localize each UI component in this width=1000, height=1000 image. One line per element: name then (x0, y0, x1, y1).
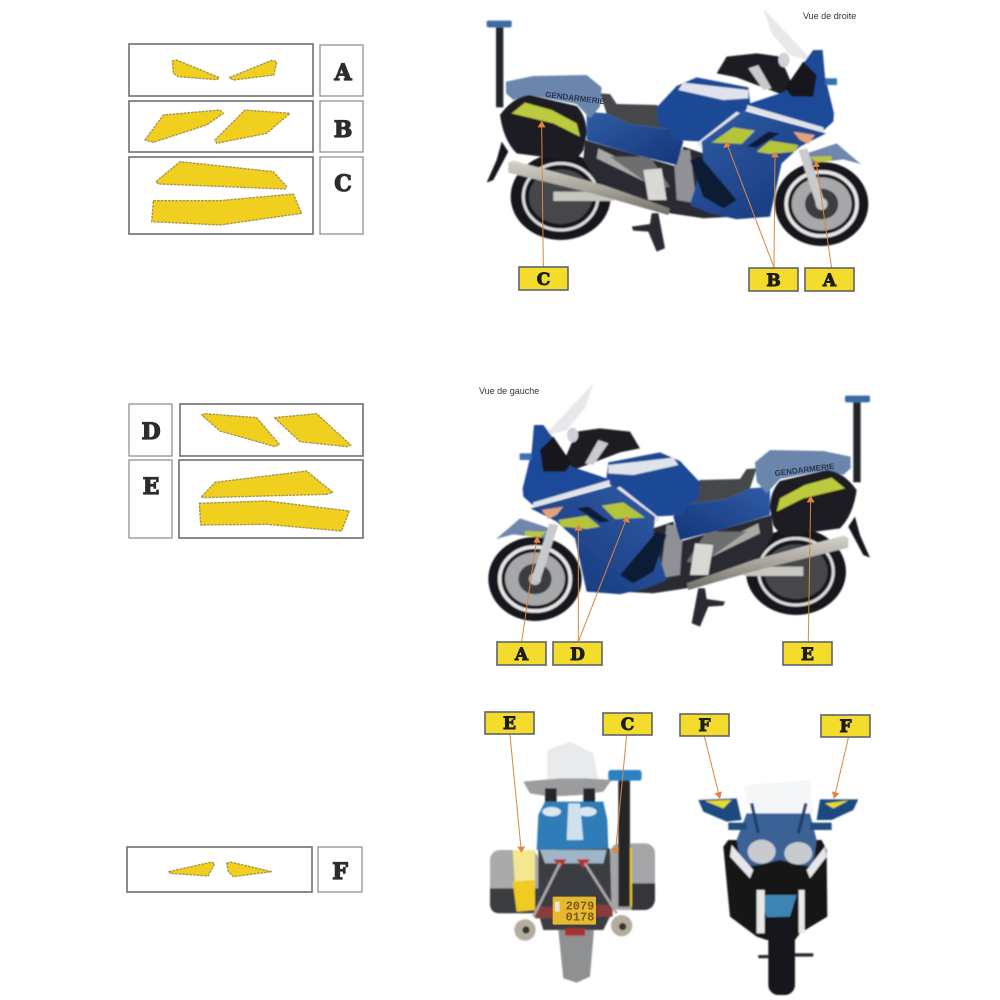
windshield (743, 780, 813, 813)
panel: sticker C: C (334, 171, 352, 197)
panel: sticker B: B (334, 117, 352, 143)
label A: A (822, 271, 837, 291)
arrows: rear view (510, 735, 627, 854)
front wheel (768, 913, 795, 995)
panel: sticker E (129, 460, 363, 538)
licence plate (553, 897, 596, 925)
label D (553, 642, 602, 665)
beacon pole (487, 21, 512, 107)
center rear (538, 848, 612, 930)
label E left: E (801, 645, 814, 665)
front mudguard (807, 143, 861, 164)
label E rear (485, 712, 534, 734)
frame and engine (553, 140, 747, 218)
exhaust (508, 161, 670, 215)
label D: D (570, 645, 585, 665)
fork (798, 148, 825, 206)
front wheel (775, 162, 868, 246)
blue body (537, 802, 608, 850)
left pannier (490, 850, 538, 913)
mudguard (760, 895, 797, 917)
label B: B (766, 271, 781, 291)
fairing (690, 111, 826, 219)
panel: sticker E: E (143, 474, 159, 500)
label F right: F (839, 717, 852, 737)
panel: sticker B (129, 101, 363, 152)
upper fairing (750, 50, 834, 131)
right mirror (817, 799, 858, 820)
panel: sticker F: F (332, 859, 348, 885)
beacon pole (618, 780, 630, 907)
white frame stripe (697, 112, 741, 149)
exhausts (514, 919, 536, 941)
caption: right view: Vue de droite (803, 11, 856, 21)
handlebar mass (717, 53, 792, 95)
side stand (632, 213, 665, 252)
seat (600, 93, 674, 129)
label A left (497, 642, 546, 665)
label A left: A (514, 645, 529, 665)
right pannier (610, 843, 655, 910)
photo: motorcycle rear view (490, 735, 655, 983)
caption: left view: Vue de gauche (479, 386, 539, 396)
tank (657, 77, 751, 142)
mirror stickers (705, 800, 732, 808)
photo: motorcycle front view (698, 736, 858, 995)
lower dark body (723, 840, 827, 940)
label A (805, 268, 854, 291)
arrows: right view (538, 121, 832, 268)
pannier lettering right: GENDARMERIE (545, 90, 606, 106)
blue nose (737, 813, 817, 867)
panel: sticker F (127, 847, 362, 892)
label F right (821, 715, 870, 737)
windshield (547, 742, 598, 779)
label F left (680, 714, 729, 736)
dark vent (690, 157, 737, 208)
arrows: left view (522, 496, 815, 642)
windshield (763, 8, 813, 62)
rear stay (487, 142, 508, 183)
yellow reflective stickers (512, 103, 832, 163)
label F left: F (698, 716, 711, 736)
licence plate: 0178 (566, 911, 594, 925)
headlights (748, 840, 776, 864)
label C (519, 267, 568, 290)
label C rear (603, 713, 652, 735)
panel: sticker D: D (141, 419, 161, 445)
rear body (587, 112, 683, 165)
tail blue (506, 75, 602, 118)
label E rear: E (503, 714, 516, 734)
white fairing stripes (730, 845, 753, 878)
left mirror (698, 798, 742, 822)
indicator (793, 132, 815, 144)
light bars (728, 823, 747, 830)
panel: sticker D (129, 404, 363, 456)
tank stripe (678, 83, 748, 100)
panel: sticker A: A (333, 60, 352, 86)
rear mudguard (558, 930, 594, 983)
arrows: front view (704, 736, 849, 799)
pannier lettering left: GENDARMERIE (774, 462, 835, 478)
label C: C (537, 270, 550, 290)
photo: motorcycle right side (487, 8, 868, 252)
rear wheel (511, 153, 611, 240)
pannier (500, 95, 587, 160)
panel: sticker C (129, 157, 363, 234)
photo: motorcycle left side (488, 383, 870, 627)
label C rear: C (621, 715, 634, 735)
side stand (758, 955, 813, 957)
handlebars (523, 778, 612, 797)
label E left (783, 642, 832, 665)
panel: sticker A (129, 44, 363, 96)
label B (749, 268, 798, 291)
licence plate: 2079 (566, 899, 594, 913)
